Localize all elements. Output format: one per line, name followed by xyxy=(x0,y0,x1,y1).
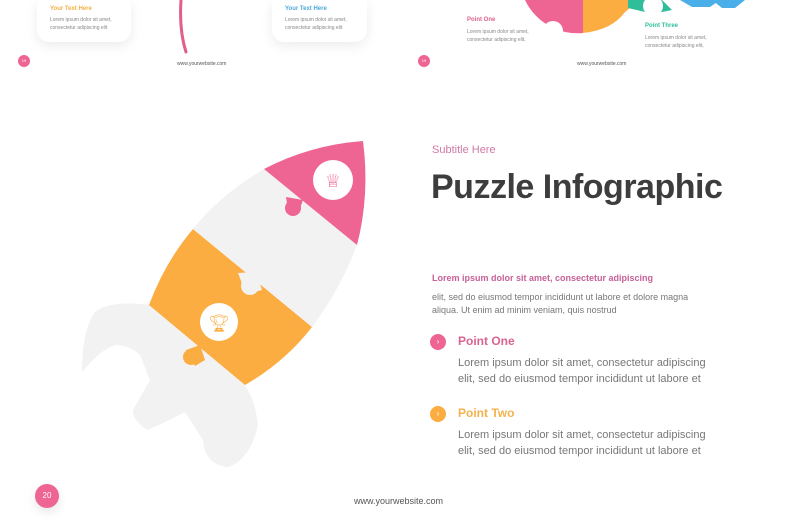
page number 19: 19 xyxy=(22,58,26,63)
page number: 20 xyxy=(43,491,51,500)
bullet pink xyxy=(430,334,446,350)
footer url: www.yourwebsite.com xyxy=(577,61,626,67)
intro text block: Lorem ipsum dolor sit amet, consectetur adipiscing xyxy=(432,273,653,283)
card: yellow: consectetur adipiscing elit xyxy=(50,25,107,31)
pink nose piece: ♕ xyxy=(325,171,341,191)
point two: elit, sed do eiusmod tempor incididunt ut labore et xyxy=(458,445,701,457)
page number xyxy=(35,484,59,508)
intro text block: aliqua. Ut enim ad minim veniam, quis nostrud xyxy=(432,305,617,315)
point one: Point One xyxy=(458,334,515,348)
footer url: www.yourwebsite.com xyxy=(354,496,443,506)
card: blue: consectetur adipiscing elit xyxy=(285,25,342,31)
previous slide strip right: consectetur adipiscing elit, xyxy=(645,43,704,49)
intro text block: elit, sed do eiusmod tempor incididunt ut labore et dolore magna xyxy=(432,292,688,302)
page number 19 xyxy=(418,55,430,67)
pink nose piece xyxy=(264,141,365,245)
point one: elit, sed do eiusmod tempor incididunt ut labore et xyxy=(458,373,701,385)
footer url: www.yourwebsite.com xyxy=(177,61,226,67)
previous slide strip right xyxy=(418,0,745,67)
orange piece xyxy=(149,229,312,385)
page number 19: 19 xyxy=(422,58,426,63)
point one xyxy=(430,334,706,385)
page number 19 xyxy=(18,55,30,67)
rocket fins xyxy=(82,304,258,467)
pink curve line xyxy=(179,0,188,54)
rocket body gray xyxy=(193,169,357,327)
previous slide strip left xyxy=(18,0,368,67)
previous slide strip right: consectetur adipiscing elit, xyxy=(467,37,526,43)
orange piece: 🏆︎ xyxy=(208,314,230,333)
puzzle shapes xyxy=(525,0,745,34)
point two xyxy=(430,406,706,457)
text: point one small: Point One xyxy=(467,17,495,23)
bullet orange: › xyxy=(437,409,439,418)
card: blue xyxy=(272,0,367,42)
card: blue: Lorem ipsum dolor sit amet, xyxy=(285,17,347,23)
previous slide strip right: Lorem ipsum dolor sit amet, xyxy=(645,35,707,41)
rocket illustration xyxy=(82,141,366,467)
intro text block xyxy=(432,273,688,315)
text: point three small: Point Three xyxy=(645,23,678,29)
point one: Lorem ipsum dolor sit amet, consectetur adipiscing xyxy=(458,357,706,369)
subtitle: Subtitle Here xyxy=(432,144,496,156)
point two: Point Two xyxy=(458,406,514,420)
bullet orange xyxy=(430,406,446,422)
previous slide strip right: Lorem ipsum dolor sit amet, xyxy=(467,29,529,35)
card: blue: Your Text Here xyxy=(285,6,327,12)
card: yellow: Lorem ipsum dolor sit amet, xyxy=(50,17,112,23)
card: yellow: Your Text Here xyxy=(50,6,92,12)
card: yellow xyxy=(37,0,131,42)
point two: Lorem ipsum dolor sit amet, consectetur adipiscing xyxy=(458,429,706,441)
bullet pink: › xyxy=(437,337,439,346)
title: Puzzle Infographic xyxy=(431,168,722,206)
